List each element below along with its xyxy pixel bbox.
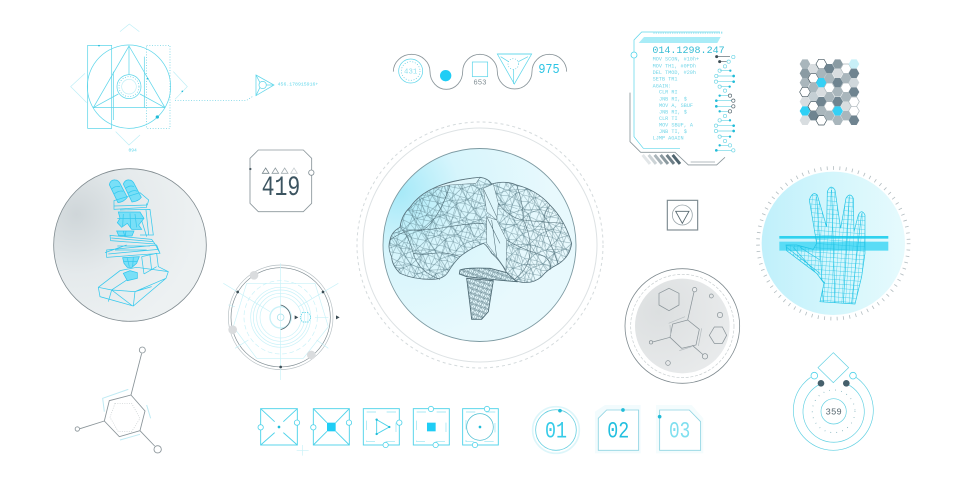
- code lines: LJMP AGAIN: [653, 136, 684, 142]
- grey nodes: [228, 271, 316, 359]
- geometric diagram: triangle in circle: [71, 24, 319, 154]
- icon: X square dot: [258, 409, 309, 456]
- triangle button: [667, 200, 698, 230]
- value card 419: [249, 150, 314, 212]
- badge 03: 03: [669, 419, 690, 445]
- code lines: MOV A, SBUF: [659, 103, 693, 109]
- code lines: MOV SBUF, A: [659, 123, 694, 129]
- value 975: 975: [538, 62, 560, 78]
- square with value 653: 653: [473, 80, 487, 88]
- cyan bracket accents: [103, 389, 151, 440]
- code number: 014.1298.247: [652, 45, 725, 57]
- badge 03: [656, 405, 703, 453]
- code readout panel: [630, 32, 735, 165]
- icon: triangle nodes: [363, 409, 402, 448]
- radar dial: [223, 263, 340, 380]
- molecule diagram: [75, 347, 161, 453]
- dial 431: 431: [404, 69, 418, 77]
- triangle emblem: [497, 54, 532, 84]
- number 359: 359: [826, 408, 842, 418]
- DNA strand: [714, 55, 735, 152]
- wave indicator strip: [393, 54, 567, 89]
- square with value 653: [472, 62, 488, 88]
- hand scan circle: [758, 168, 909, 319]
- small triangle marker: [256, 75, 274, 96]
- icon: X square filled center: [311, 409, 352, 445]
- central brain circle: [357, 122, 603, 368]
- wireframe hand: [786, 187, 865, 304]
- code lines: AGAIN:: [653, 83, 671, 89]
- badge 01: 01: [545, 419, 567, 445]
- diagram number: 094: [128, 148, 137, 154]
- microscope circle: [54, 169, 206, 321]
- scan band: [779, 236, 888, 251]
- wireframe brain: [389, 177, 572, 319]
- petri dish: [625, 269, 740, 383]
- cyan dot: [440, 70, 451, 81]
- code lines: CLR RI: [659, 90, 678, 96]
- code lines: CLR TI: [659, 116, 678, 122]
- ring nodes: [811, 372, 856, 387]
- code lines: JNB TI, $: [659, 129, 687, 135]
- dashed hexagon target: [300, 313, 311, 322]
- number 419: 419: [262, 173, 300, 204]
- panel frame: [630, 32, 725, 165]
- code lines: DEL TMOD, #20h: [653, 70, 696, 76]
- badge 01: [533, 407, 579, 453]
- code lines: SETB TR1: [653, 77, 677, 83]
- code lines: MOV TH1, #0FDh: [653, 63, 696, 69]
- icon: filled square: [413, 406, 449, 448]
- hexagon cell grid: [800, 59, 859, 125]
- ring gauge 359: [793, 353, 873, 450]
- brain stem: [459, 268, 517, 319]
- dial 431: [399, 59, 423, 83]
- dotted inner hexagon: [110, 403, 140, 432]
- dotted connector: [175, 96, 253, 100]
- code lines: JNB RI, $: [659, 109, 687, 115]
- grey hatch: [643, 155, 680, 164]
- code lines: JNB RI, $: [659, 96, 687, 102]
- marker code label: 456.178915916+: [278, 83, 319, 88]
- bottom square icon row: [258, 405, 703, 456]
- diamond marker: [818, 353, 849, 383]
- code lines: [653, 57, 699, 142]
- microscope drawing: [98, 180, 168, 306]
- badge 02: [595, 405, 641, 453]
- code lines: MOV SCON, #10h+: [653, 57, 699, 63]
- hatched header bars: [639, 33, 723, 43]
- dark node dots: [236, 291, 340, 368]
- petri molecule: [649, 287, 727, 365]
- triangle rating: [262, 168, 297, 173]
- icon: circle dot: [463, 406, 498, 448]
- badge 02: 02: [607, 419, 629, 445]
